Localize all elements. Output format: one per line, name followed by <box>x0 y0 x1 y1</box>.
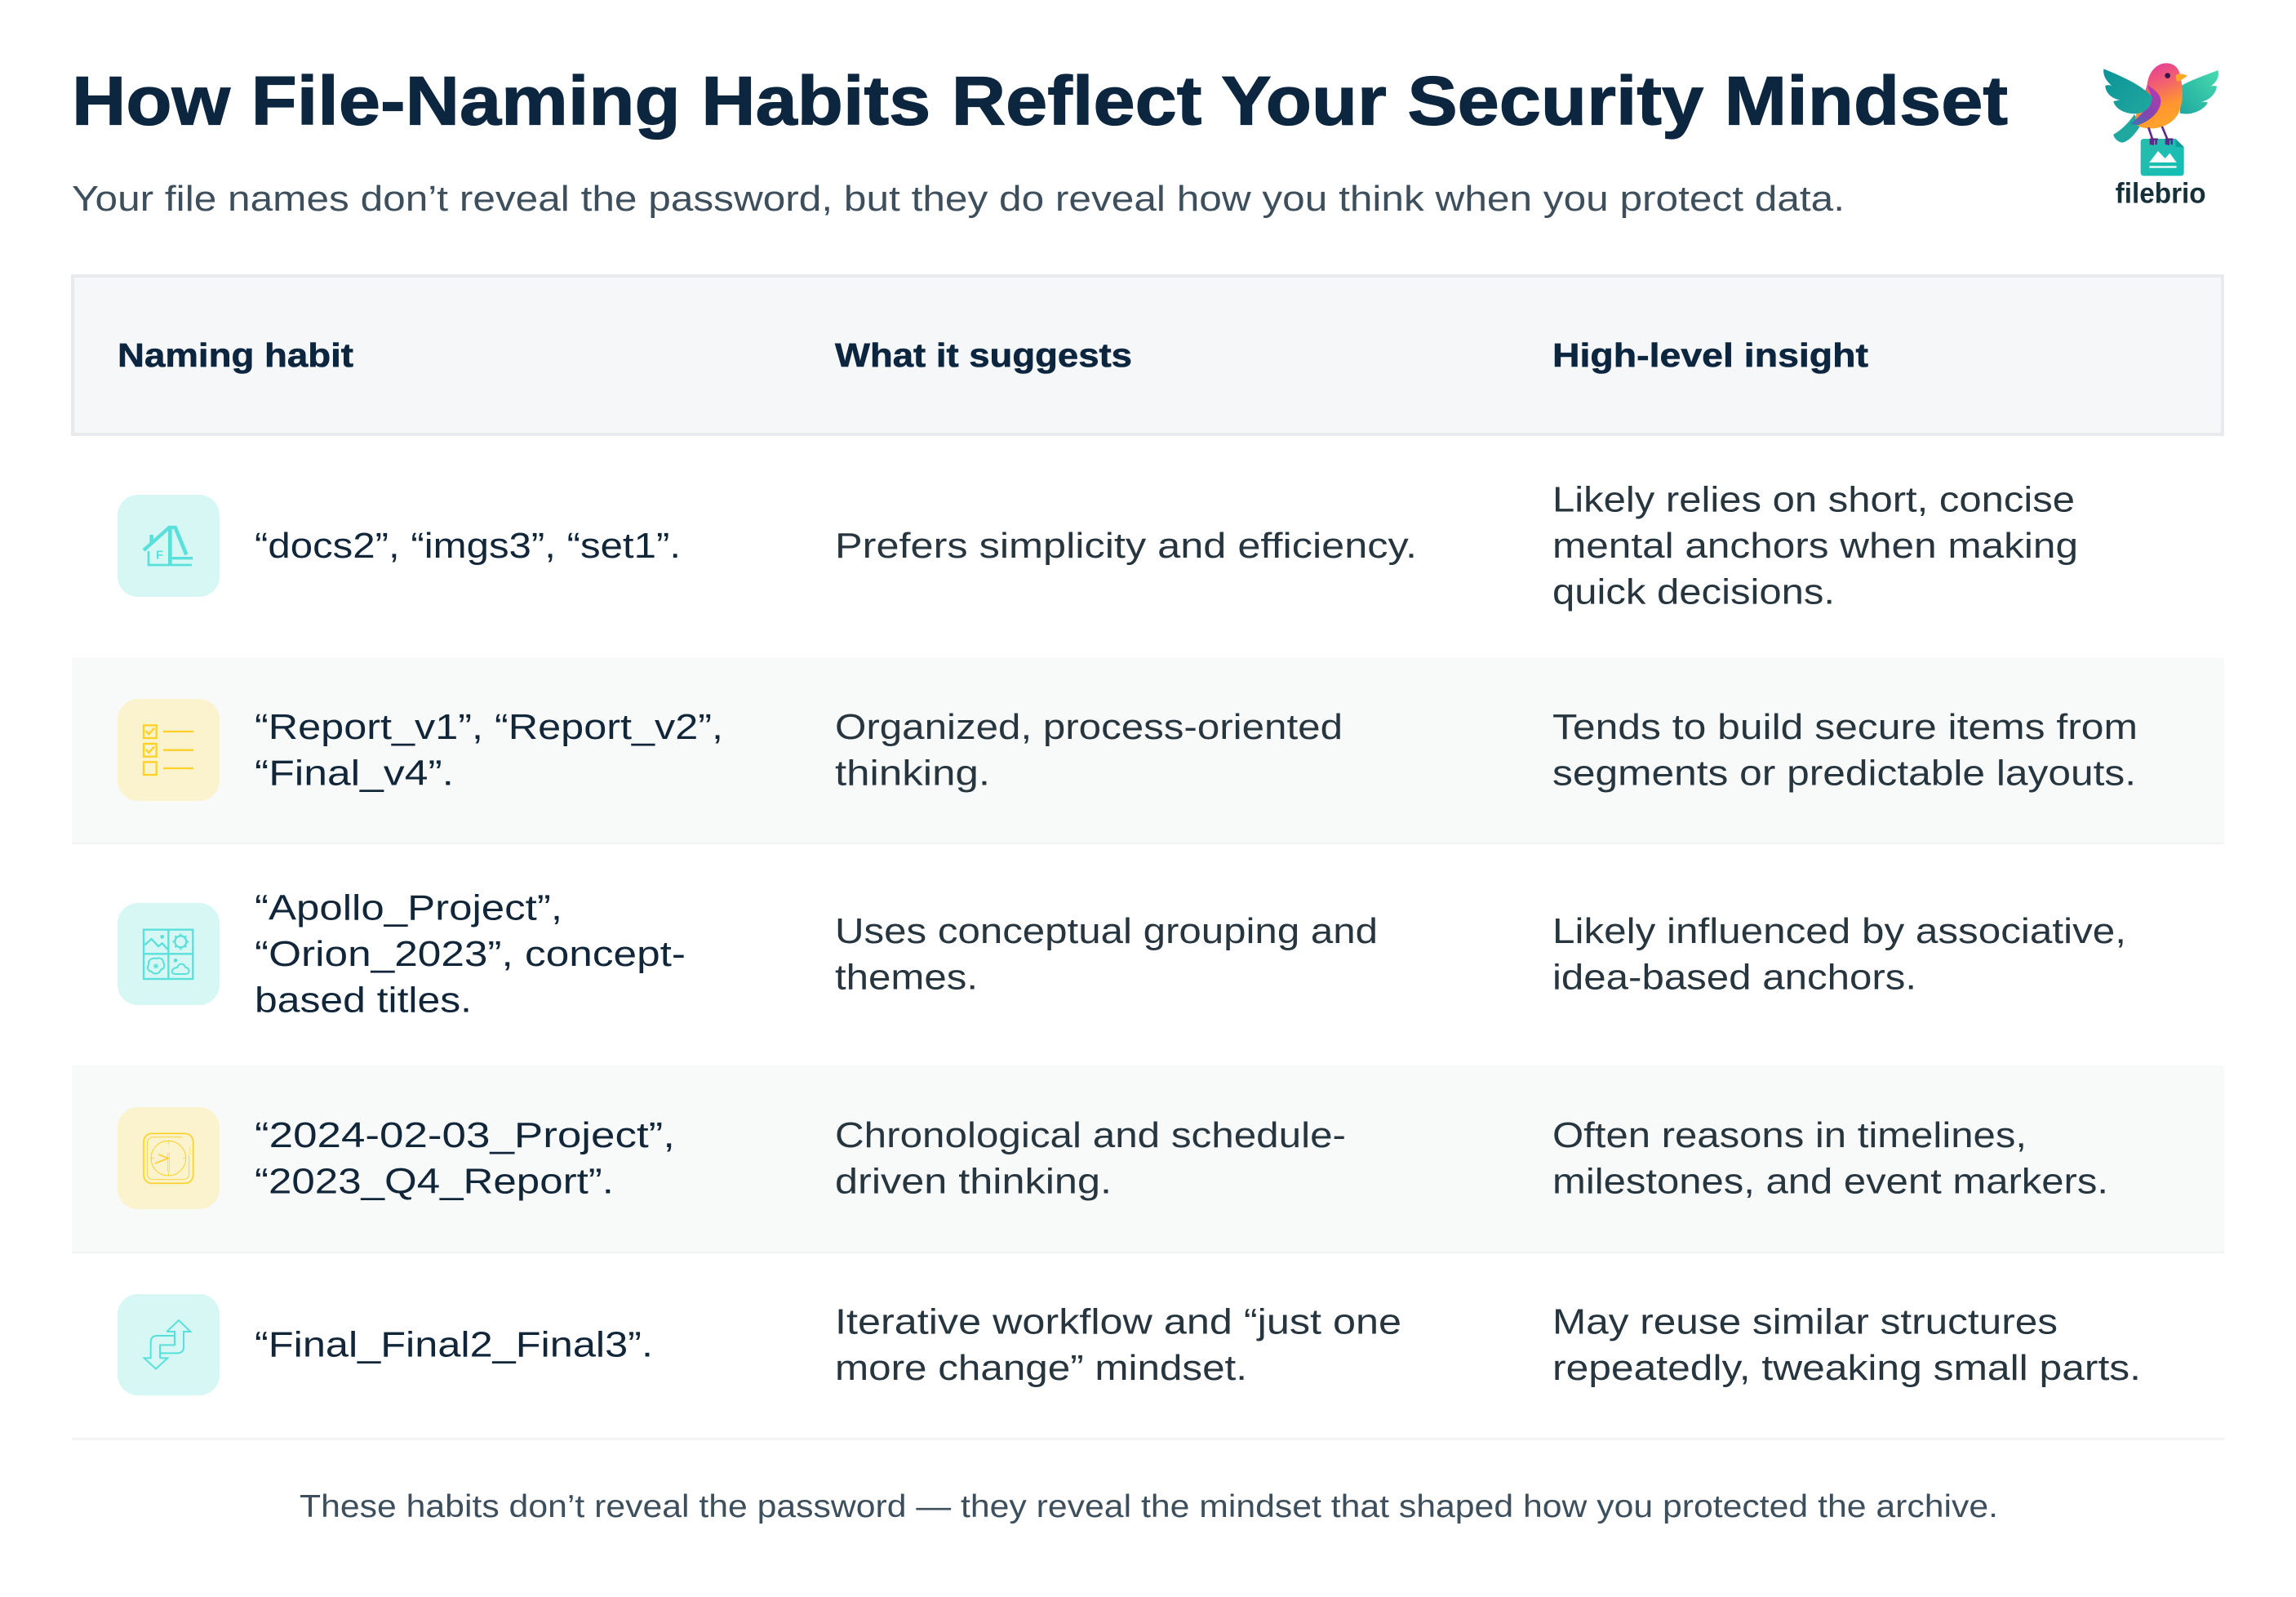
suggestion text: more change” mindset. <box>835 1349 1247 1388</box>
habit text: “Report_v1”, “Report_v2”, <box>255 708 723 747</box>
habit text: “2024-02-03_Project”, <box>255 1116 675 1155</box>
table header <box>73 276 2223 434</box>
file picture glyph <box>2149 151 2177 168</box>
suggestion text: driven thinking. <box>835 1162 1112 1201</box>
legs <box>2149 127 2172 145</box>
suggestion text: thinking. <box>835 754 990 793</box>
insight text <box>1552 708 2138 793</box>
suggestion text <box>835 912 1378 997</box>
bird body <box>2135 63 2183 128</box>
insight text: May reuse similar structures <box>1552 1302 2058 1341</box>
insight text <box>1552 1302 2141 1388</box>
icon: clock <box>118 1107 220 1209</box>
logo: filebrio bird on file <box>2103 63 2218 209</box>
insight text <box>1552 480 2078 612</box>
insight text <box>1552 1116 2108 1201</box>
purple flank <box>2130 85 2161 125</box>
logo wordmark: filebrio <box>2116 177 2206 209</box>
habit text: “docs2”, “imgs3”, “set1”. <box>255 527 681 566</box>
habit text: “Orion_2023”, concept- <box>255 935 686 974</box>
habit text <box>255 1116 675 1201</box>
suggestion text <box>835 1302 1401 1388</box>
insight text: Often reasons in timelines, <box>1552 1116 2027 1155</box>
title: How File-Naming Habits Reflect Your Security Mindset <box>72 62 2008 139</box>
insight text: Likely relies on short, concise <box>1552 480 2075 519</box>
beak <box>2176 74 2187 82</box>
insight text: milestones, and event markers. <box>1552 1162 2108 1201</box>
insight text: mental anchors when making <box>1552 527 2078 566</box>
insight text: idea-based anchors. <box>1552 958 1916 997</box>
habit text: “Final_v4”. <box>255 754 454 793</box>
habit text <box>255 708 723 793</box>
suggestion text: Organized, process-oriented <box>835 708 1343 747</box>
row 3 <box>118 888 2126 1021</box>
suggestion text: Uses conceptual grouping and <box>835 912 1378 951</box>
habit text: based titles. <box>255 981 472 1021</box>
habit text: “Apollo_Project”, <box>255 888 562 928</box>
tail <box>2113 114 2141 143</box>
suggestion text: themes. <box>835 958 978 997</box>
insight text: repeatedly, tweaking small parts. <box>1552 1349 2141 1388</box>
column heading: high-level insight: High-level insight <box>1552 336 1868 374</box>
icon: swap arrows <box>118 1294 220 1395</box>
insight text: Likely influenced by associative, <box>1552 912 2126 951</box>
column heading: naming habit: Naming habit <box>118 336 353 374</box>
habit text: “Final_Final2_Final3”. <box>255 1326 653 1365</box>
insight text: Tends to build secure items from <box>1552 708 2138 747</box>
insight text <box>1552 912 2126 997</box>
suggestion text: Prefers simplicity and efficiency. <box>835 527 1417 566</box>
suggestion text <box>835 1116 1346 1201</box>
icon: four-panel picture grid <box>118 903 220 1005</box>
eye <box>2165 73 2170 78</box>
suggestion text <box>835 708 1343 793</box>
row 2 <box>72 657 2224 844</box>
row 4 <box>72 1065 2224 1253</box>
habit text <box>255 888 686 1021</box>
file <box>2141 139 2184 176</box>
row 1 <box>118 480 2078 612</box>
icon: house and sail <box>118 495 220 597</box>
right wing <box>2180 70 2218 114</box>
suggestion text: Chronological and schedule- <box>835 1116 1346 1155</box>
suggestion text: Iterative workflow and “just one <box>835 1302 1401 1341</box>
icon: checklist <box>118 699 220 801</box>
habit text: “2023_Q4_Report”. <box>255 1162 614 1201</box>
subtitle: Your file names don’t reveal the password, but they do reveal how you think when you protect data. <box>72 180 1845 219</box>
column heading: what it suggests: What it suggests <box>835 336 1132 374</box>
footer note: These habits don’t reveal the password — they reveal the mindset that shaped how you protected the archive. <box>300 1489 1998 1524</box>
insight text: segments or predictable layouts. <box>1552 754 2136 793</box>
insight text: quick decisions. <box>1552 573 1835 612</box>
icon: house and sail: F <box>156 549 163 563</box>
row 5 <box>72 1294 2224 1440</box>
left wing <box>2103 69 2152 113</box>
